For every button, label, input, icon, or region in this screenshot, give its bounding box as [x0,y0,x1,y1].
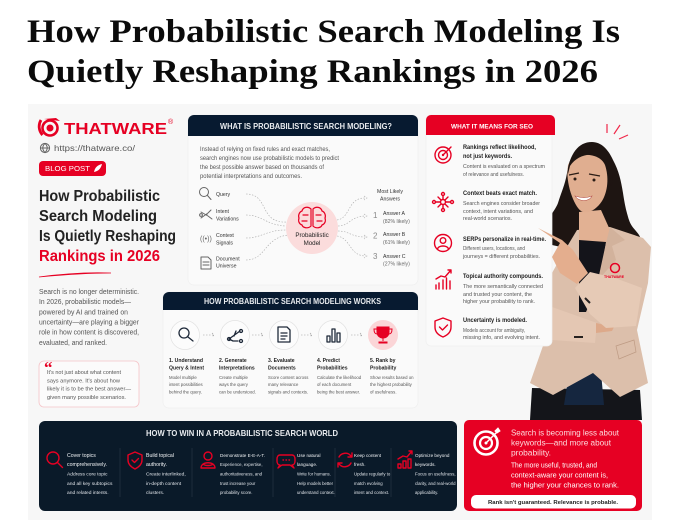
intro paragraph: evaluated, and ranked. [39,340,107,347]
callout text: the higher your chances to rank. [511,480,619,490]
step text: 3. Evaluate [268,358,295,364]
item descriptions: and trusted your content, the [463,292,532,298]
tip text: in-depth content [146,481,182,487]
item headings: Context beats exact match. [463,190,537,197]
tip text: clarity, and real-world [415,481,456,486]
description: the best possible answer based on thousands of [200,164,324,171]
tip text: Use natural [297,453,320,458]
tip text: Focus on usefulness, [415,472,456,476]
quote box: likely it is to be the best answer— [47,386,131,392]
intro paragraph: In 2026, probabilistic models— [39,299,131,306]
step text: Interpretations [219,366,255,372]
item headings [463,144,546,324]
item descriptions: Content is evaluated on a spectrum [463,164,545,170]
answers: 1 [373,211,378,220]
inputs: Context [216,233,234,239]
tip text: and all key subtopics [67,481,113,487]
tip text: Write for humans. [297,472,331,476]
blog post badge: BLOG POST [45,164,90,173]
header: HOW PROBABILISTIC SEARCH MODELING WORKS [204,297,381,306]
tip text: authority. [146,462,167,468]
header: WHAT IT MEANS FOR SEO [451,124,533,130]
header [426,115,555,135]
tip text: probability score. [220,490,252,495]
step text: Documents [268,366,296,372]
heading [39,188,176,265]
quote box [39,358,139,407]
tip text: fresh. [354,462,366,467]
callout text: Search is becoming less about [511,428,620,438]
tip dividers [120,448,391,497]
panel: what is probabilistic search modeling [188,115,418,285]
item descriptions: of relevance and usefulness. [463,172,524,178]
tip text: Optimize beyond [415,453,450,458]
panel: how it works: of each document [317,382,352,387]
step text: 1. Understand [169,358,203,364]
callout text: keywords—and more about [511,438,612,448]
answers: Answer A [383,211,405,217]
heading: Is Quietly Reshaping [39,228,176,245]
answers: 2 [373,232,378,240]
item descriptions: context, intent variations, and [463,209,533,215]
logo [39,118,174,138]
title: Quietly Reshaping Rankings in 2026 [27,54,598,90]
step text: Query & Intent [169,366,204,372]
probabilistic model circle [286,202,338,254]
callout text: context-aware your content is, [511,470,608,480]
tip icons [47,451,412,469]
target icon [474,428,500,454]
connector lines [246,194,367,260]
tip text: Create interlinked, [146,472,186,478]
inputs: Variations [216,216,239,222]
panel: brand and intro [39,118,176,407]
quote box: It's not just about what content [47,370,121,376]
tagline pill: Rank isn't guaranteed. Relevance is probable. [488,500,618,506]
item icons [432,147,454,337]
tip text: Experience, expertise, [220,462,263,467]
item descriptions: journeys = different probabilities. [462,254,540,260]
infographic background [28,104,652,520]
item descriptions: real-world scenarios. [463,216,512,222]
attention marks [607,124,628,139]
step circles [170,320,398,350]
intro paragraph: Search is no longer deterministic. [39,289,139,296]
intro paragraph: role in how content is discovered, [39,330,139,336]
website url: https://thatware.co/ [54,143,136,153]
step text [169,358,396,372]
item headings: Topical authority compounds. [463,273,543,280]
panel: red callout [464,420,642,511]
tip text: match evolving [354,481,383,486]
swoosh [39,273,111,277]
tip text: language. [297,462,317,467]
item descriptions [462,164,545,341]
heading: Rankings in 2026 [39,248,160,265]
answers: 3 [373,252,378,261]
blog post badge [39,161,106,176]
heading: Search Modeling [39,208,157,225]
step text: Probabilities [317,366,348,372]
item descriptions: higher your probability to rank. [463,299,535,305]
person illustration [530,124,651,420]
step text: 4. Predict [317,358,340,364]
probabilistic model circle: Probabilistic [295,232,329,239]
callout text: The more useful, trusted, and [511,460,597,470]
jacket logo [604,264,625,279]
jacket logo: THATWARE [604,275,625,279]
answers: Answer C [383,254,406,260]
tip text: understand context. [297,490,335,495]
probabilistic model circle: Model [304,240,320,247]
item headings: SERPs personalize in real-time. [463,236,546,243]
tip text: Cover topics [67,453,96,459]
tip text [67,453,456,496]
quote box: “ [44,358,52,377]
lapel [598,227,625,280]
header: WHAT IS PROBABILISTIC SEARCH MODELING? [220,122,392,131]
panel: how it works: Create multiple [219,375,249,380]
description: potential interpretations and outcomes. [200,173,302,180]
tip text: comprehensively. [67,462,107,468]
inputs [200,188,240,270]
title [27,14,620,90]
lower arm [552,307,597,343]
logo: ® [168,118,174,126]
answers: Most Likely [377,189,403,195]
description: Instead of relying on fixed rules and exact matches, [200,146,330,153]
hair front [568,148,613,186]
header [163,292,418,310]
crossing sleeve [575,272,642,328]
tip text: trust increase your [220,481,256,486]
item headings: Uncertainty is modeled. [463,317,527,324]
tip text: Build topical [146,453,174,459]
answers: (27% likely) [383,262,410,268]
sleeve buttons [574,298,590,337]
item descriptions: Search engines consider broader [463,201,540,207]
panel: how it works: Calculate the likelihood [317,375,362,380]
inputs: Document [216,256,240,262]
quote box: says anymore. It's about how [47,378,121,384]
heading: How Probabilistic [39,188,160,205]
hair back [548,142,641,249]
inputs: ((•)) [200,236,212,243]
tip text: and related intents. [67,490,109,496]
step text: 5. Rank by [370,358,396,364]
step arrows [203,333,362,337]
panel: how it works: of usefulness. [370,390,397,394]
item headings: Rankings reflect likelihood, [463,144,536,151]
callout text [511,428,620,490]
description: search engines now use probabilistic models to predict [200,155,339,162]
answers: (82% likely) [383,219,410,225]
quote box: given many possible scenarios. [47,395,126,401]
tip text: authoritativeness, and [220,472,263,476]
panel: how it works: Show results based on [370,375,414,380]
intro paragraph [39,289,140,347]
tip text: applicability. [415,490,438,495]
panel: how it works: Score content across [268,375,308,380]
panel: how it works: ways the query [219,382,249,387]
item descriptions: Different users, locations, and [463,246,525,252]
face [567,155,607,212]
intro paragraph: uncertainty—are playing a bigger [39,320,140,326]
panel: how it works: Model multiple [169,375,197,380]
tip text: Address core topic [67,472,108,478]
callout text: probability. [511,448,551,458]
panel: how it works: signals and contexts. [268,390,308,394]
neck and chest [579,210,610,243]
intro paragraph: powered by AI and trained on [39,310,128,316]
panel: how it works: can be understood. [219,390,256,394]
answers [373,189,410,268]
tip text: Demonstrate E-E-A-T. [220,453,265,458]
item headings: not just keywords. [463,153,512,160]
tip text: intent and context. [354,490,389,495]
tip text: keywords. [415,462,436,467]
answers: (61% likely) [383,240,410,246]
trousers [530,388,642,420]
panel: how it works: being the best answer. [317,390,360,394]
inputs: Signals [216,240,233,246]
answers: Answer B [383,232,406,238]
item descriptions: The more semantically connected [463,284,543,290]
panel: how it works: behind the query. [169,390,202,394]
heading: HOW TO WIN IN A PROBABILISTIC SEARCH WORLD [146,429,338,438]
title: How Probabilistic Search Modeling Is [27,14,620,50]
tagline pill [471,495,636,508]
pointing hand [538,228,588,284]
step text: Probability [370,366,396,372]
hidden hand [596,323,614,333]
inputs: Query [216,192,231,198]
header [188,115,418,136]
jacket [530,227,651,397]
tip text: Keep content [354,453,382,458]
step icons [179,327,392,343]
answers: Answers [380,196,400,202]
item descriptions: missing info, and evolving intent. [463,335,540,341]
panel: how it works: many relevance [268,382,299,387]
panel: how to win [39,421,457,511]
item descriptions: Models account for ambiguity, [463,328,525,334]
panel: how it works: the highest probability [370,382,413,387]
panel: how it works: intent possibilities [169,382,203,387]
description [200,146,339,180]
logo: THATWARE [64,121,167,138]
tip text: Update regularly to [354,472,391,476]
tip text: Help models better [297,481,334,486]
inputs: Intent [216,209,230,215]
inputs: Universe [216,264,237,270]
black top [579,240,606,312]
panel: what it means for SEO [426,115,555,346]
step text: 2. Generate [219,358,247,364]
jacket pocket [616,340,636,359]
panel: how it works [163,292,418,408]
tip text: clusters. [146,490,164,496]
